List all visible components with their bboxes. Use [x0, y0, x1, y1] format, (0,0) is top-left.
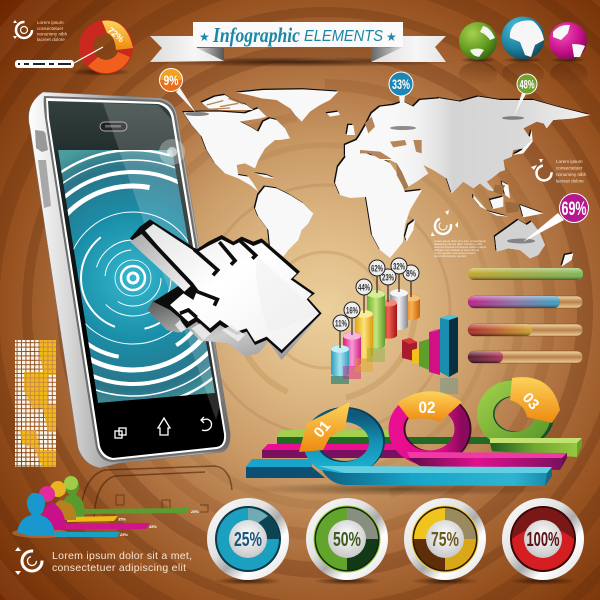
- green ribbon: [277, 388, 582, 457]
- magenta ribbon: [262, 400, 567, 470]
- progress bar 4: [468, 351, 583, 363]
- ribbon loops chart: [240, 377, 582, 496]
- gauge button 75%: 75%: [431, 529, 459, 551]
- title ribbon: ELEMENTS: [304, 28, 383, 45]
- text block: bottom-left: Lorem ipsum dolor sit a met,: [52, 550, 192, 562]
- pin: 33%: [389, 72, 416, 130]
- cyan person and bar: 25%: [119, 532, 128, 537]
- hand: index side strip: [130, 234, 191, 292]
- gauge button 50%: 50%: [333, 529, 361, 551]
- pin: 9%: 9%: [164, 72, 179, 88]
- title ribbon: Infographic: [212, 23, 301, 47]
- map tint: Asia and Australia: [360, 97, 590, 258]
- text block: top-left: [37, 20, 68, 42]
- yellow person and bar: 35%: [118, 516, 126, 522]
- title ribbon: ★: [199, 30, 210, 44]
- cap 03: [510, 377, 560, 423]
- map detail: Southeast Asia seas: [493, 185, 520, 213]
- icon and text: right: Lorem ipsum: [556, 159, 583, 164]
- text block: top-left: lacreet dolore: [37, 37, 65, 42]
- green person and bar: 25%: [190, 509, 199, 514]
- donut chart 72%: [68, 21, 133, 76]
- phone speaker: [100, 122, 127, 131]
- cyan person and bar: [17, 493, 128, 537]
- hand: gloss: [256, 257, 319, 333]
- pin: 69%: 69%: [562, 199, 587, 220]
- icon and small text: centre right: tation ullamcorper suscipit: [434, 254, 467, 258]
- magenta person and bar: [39, 486, 157, 530]
- pin: 48%: 48%: [520, 78, 535, 92]
- gauge button 25%: [207, 498, 289, 585]
- gauge button 100%: [502, 498, 584, 585]
- phone reflection: [80, 466, 232, 520]
- gauge button 100%: 100%: [526, 529, 560, 551]
- cylinder: yellow 44%: 44%: [358, 282, 370, 292]
- text block: bottom-left: [52, 550, 192, 574]
- cap 02: 02: [418, 398, 436, 417]
- icon and small text: centre right: Lorem ipsum dolor sit a met, consectetuer: [434, 239, 486, 243]
- pin: 48%: [502, 74, 537, 120]
- magenta person and bar: 45%: [148, 524, 157, 529]
- cylinder: cyan 11%: 11%: [335, 318, 347, 328]
- gauge button 25%: 25%: [234, 529, 262, 551]
- cap 03: 03: [519, 389, 542, 413]
- icon and small text: centre right: aliquam erat volutpat ut wisi enim ad: [434, 248, 480, 252]
- icon: top-left refresh: [13, 20, 32, 39]
- hand: extruded base: [148, 300, 322, 360]
- icon and small text: centre right: [431, 210, 487, 258]
- map detail: Arctic islands: [207, 98, 243, 109]
- pin: 9%: [160, 68, 209, 116]
- donut chart 72%: 72%: [106, 25, 126, 44]
- 3D cylinder chart: [331, 258, 420, 384]
- progress bar 2: [468, 296, 583, 308]
- hand: white face: [145, 224, 319, 350]
- cylinder: red 23%: 23%: [382, 272, 394, 282]
- hand: knuckle highlights: [175, 320, 245, 342]
- phone nav icons: [115, 417, 212, 438]
- hand cursor: [130, 219, 322, 360]
- green person and bar: [62, 476, 199, 518]
- inner rings: [100, 85, 550, 535]
- cylinder: orange 8%: 8%: [406, 268, 416, 278]
- text block: bottom-left: consectetuer adipiscing elit: [52, 562, 186, 574]
- world map: [182, 88, 590, 267]
- cylinder: green 62%: 62%: [371, 264, 383, 274]
- text block: top-left: consectetuer: [37, 26, 64, 31]
- 3D bar chart: [402, 315, 458, 394]
- progress bar 3: [468, 324, 583, 336]
- icon and text: right: consectetuer: [556, 166, 583, 170]
- progress bar 1: [468, 268, 583, 280]
- cyan ribbon: [246, 414, 552, 486]
- people bars chart: [12, 476, 199, 538]
- pin: 69%: [507, 194, 588, 244]
- gauge button 75%: [404, 498, 486, 585]
- phone glare: [103, 103, 222, 420]
- cylinder: silver 32%: 32%: [393, 262, 405, 272]
- cap 01: [299, 402, 350, 452]
- hand: black outline: [130, 219, 322, 353]
- phone: [28, 92, 230, 468]
- icon and text: right: lacreet dolore: [556, 178, 584, 184]
- icon and text: right: [531, 159, 587, 184]
- globes: [459, 16, 588, 86]
- icon: bottom-left refresh: [15, 547, 42, 575]
- icon and small text: centre right: euismod tincidunt ut laoreet dolore magna: [434, 245, 487, 249]
- dot matrix chart: [15, 340, 56, 467]
- hand: black finger stripes: [142, 232, 256, 317]
- phone display: [58, 150, 215, 403]
- icon and text: right: nonummy nibh: [556, 172, 587, 177]
- donut label pill: [15, 47, 103, 68]
- icon and small text: centre right: adipiscing elit sed diam nonummy nibh: [434, 242, 482, 246]
- text block: top-left: nonummy nibh: [37, 32, 68, 36]
- pin: 33%: 33%: [392, 76, 410, 92]
- icon and small text: centre right: minim veniam quis nostrud exerci: [434, 251, 476, 255]
- cap 01: 01: [311, 417, 334, 441]
- text block: top-left: Lorem ipsum: [37, 20, 64, 25]
- title ribbon: ★: [386, 30, 397, 44]
- title ribbon: [139, 22, 459, 67]
- cylinder: magenta 16%: 16%: [346, 306, 358, 316]
- gauge button 50%: [306, 498, 388, 585]
- yellow person and bar: [50, 481, 126, 522]
- cap 02: [397, 391, 462, 422]
